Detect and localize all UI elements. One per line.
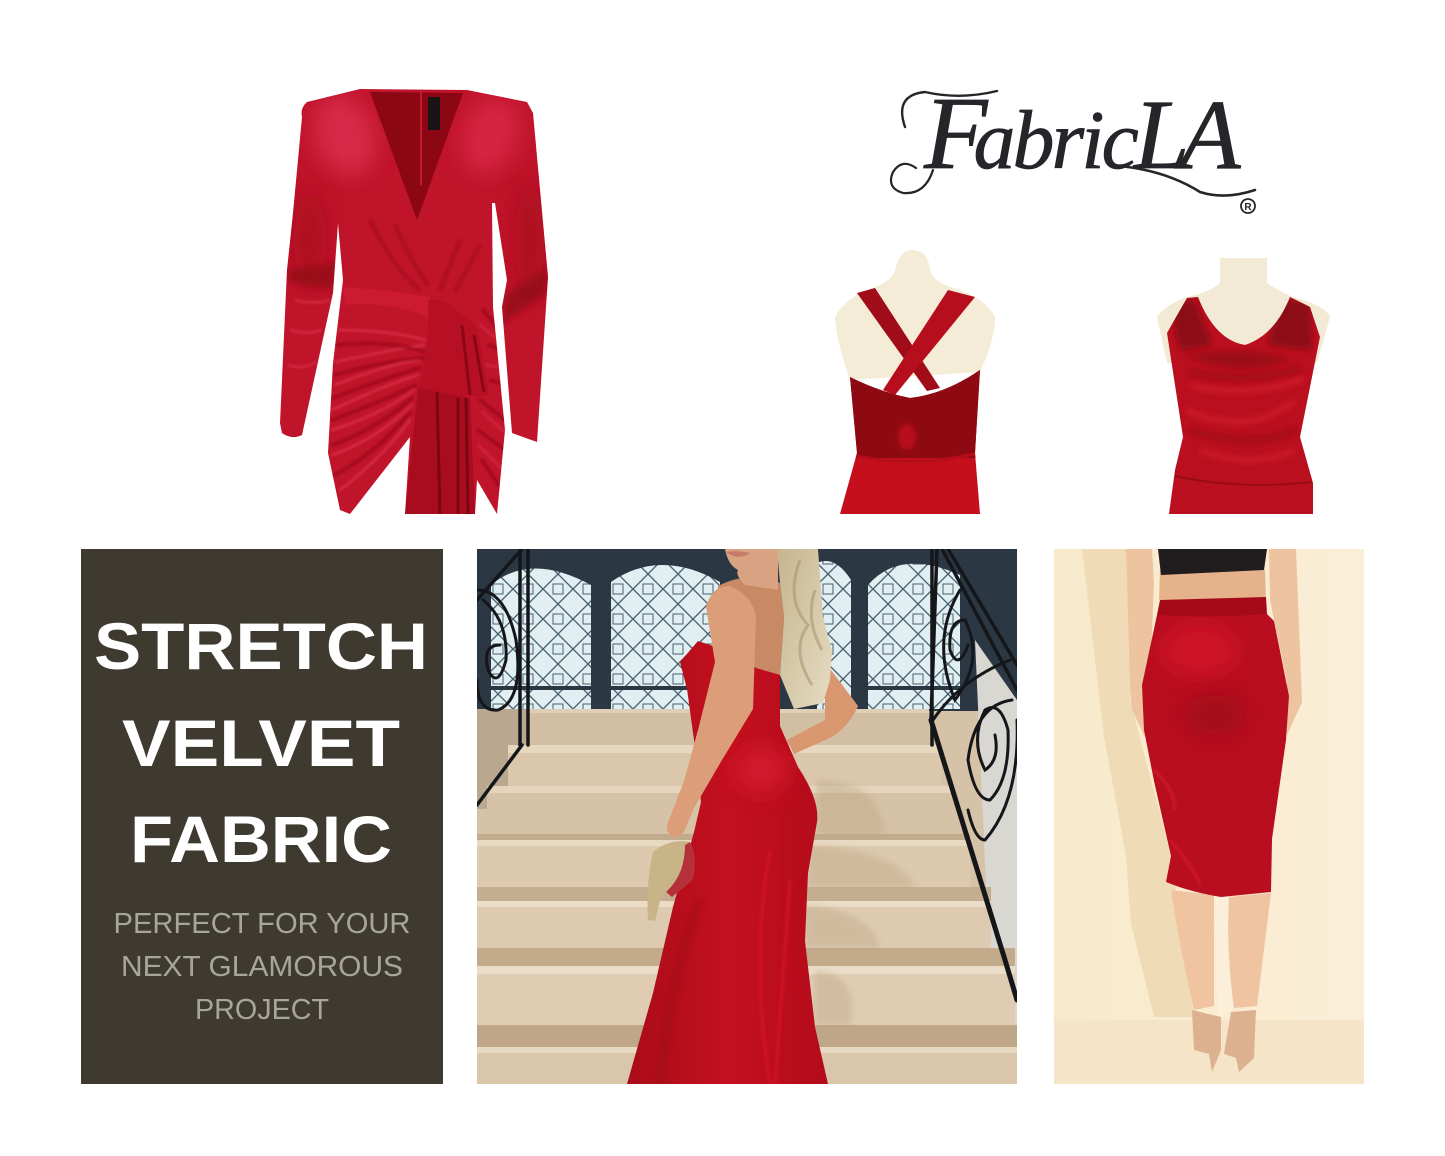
photo: red velvet long-sleeve wrap dress [280, 86, 548, 514]
hair curls [794, 560, 822, 685]
gown sheen [660, 746, 790, 1084]
window wall [477, 549, 1017, 711]
face and neck [725, 549, 778, 590]
torso [1159, 570, 1266, 600]
back bodice and skirt [840, 370, 980, 514]
legs [1171, 890, 1271, 1010]
drape folds [1168, 300, 1312, 485]
knot fold [462, 325, 484, 395]
crossing straps [857, 288, 940, 391]
lips [726, 551, 750, 557]
centre back seam [420, 90, 422, 185]
skirt [1142, 614, 1289, 897]
waistband [1157, 597, 1267, 616]
photo: cowl-neck velvet top on mannequin [1157, 258, 1330, 514]
lace top [1158, 549, 1267, 575]
photo: red velvet pencil skirt [1054, 549, 1364, 1084]
tail on L and A [1118, 166, 1255, 196]
sash tail [405, 388, 475, 514]
stairs [477, 709, 1017, 1084]
right arm [1269, 549, 1302, 735]
cowl top [1167, 297, 1320, 514]
velvet shading [287, 86, 548, 490]
subheading: NEXT GLAMOROUS [121, 951, 403, 983]
skirt gathers [332, 310, 505, 490]
clutch red edge [666, 842, 695, 897]
photo: woman in red gown on staircase [477, 549, 1017, 1084]
skirt shading [1154, 624, 1245, 885]
subheading [114, 908, 410, 1026]
tail folds [437, 392, 468, 514]
right wall [975, 640, 1017, 1025]
far arm [787, 662, 858, 754]
left arm [1126, 549, 1154, 737]
floor [1054, 1020, 1364, 1084]
subheading: PERFECT FOR YOUR [114, 908, 410, 940]
stained glass windows [491, 561, 960, 709]
window transom bars [491, 686, 960, 690]
hair [777, 549, 832, 709]
wall shadow [1082, 549, 1194, 1017]
railings [477, 549, 1017, 1000]
staircase shadows [805, 780, 915, 1025]
neck label [428, 97, 440, 130]
bodice shading [840, 370, 985, 462]
ruched gathers above sash [370, 220, 480, 292]
dress body and sleeves [280, 89, 548, 514]
sash across waist [343, 287, 430, 317]
heading: VELVET [122, 706, 400, 780]
heading [94, 609, 428, 876]
panel: title [81, 549, 443, 1084]
swash on F [902, 91, 997, 127]
wordmark: FabricLA [923, 76, 1241, 191]
clutch bag [648, 841, 695, 921]
gap between the legs [1214, 895, 1234, 1018]
tied knot [418, 300, 489, 398]
photo: cross-back velvet dress on mannequin [835, 250, 995, 514]
loop on F [891, 164, 933, 193]
back skin [718, 577, 784, 675]
second strap [883, 290, 975, 395]
heels [1192, 1010, 1256, 1072]
heading: FABRIC [130, 802, 392, 876]
subheading: PROJECT [195, 994, 329, 1026]
registered mark: R [1244, 202, 1252, 213]
heading: STRETCH [94, 609, 428, 683]
gown [627, 641, 828, 1084]
registered mark [1241, 199, 1255, 213]
near arm [667, 586, 756, 838]
mannequin [1157, 258, 1330, 363]
neckline interior [370, 92, 463, 220]
logo: FabricLA [891, 76, 1255, 213]
mannequin [835, 250, 995, 380]
